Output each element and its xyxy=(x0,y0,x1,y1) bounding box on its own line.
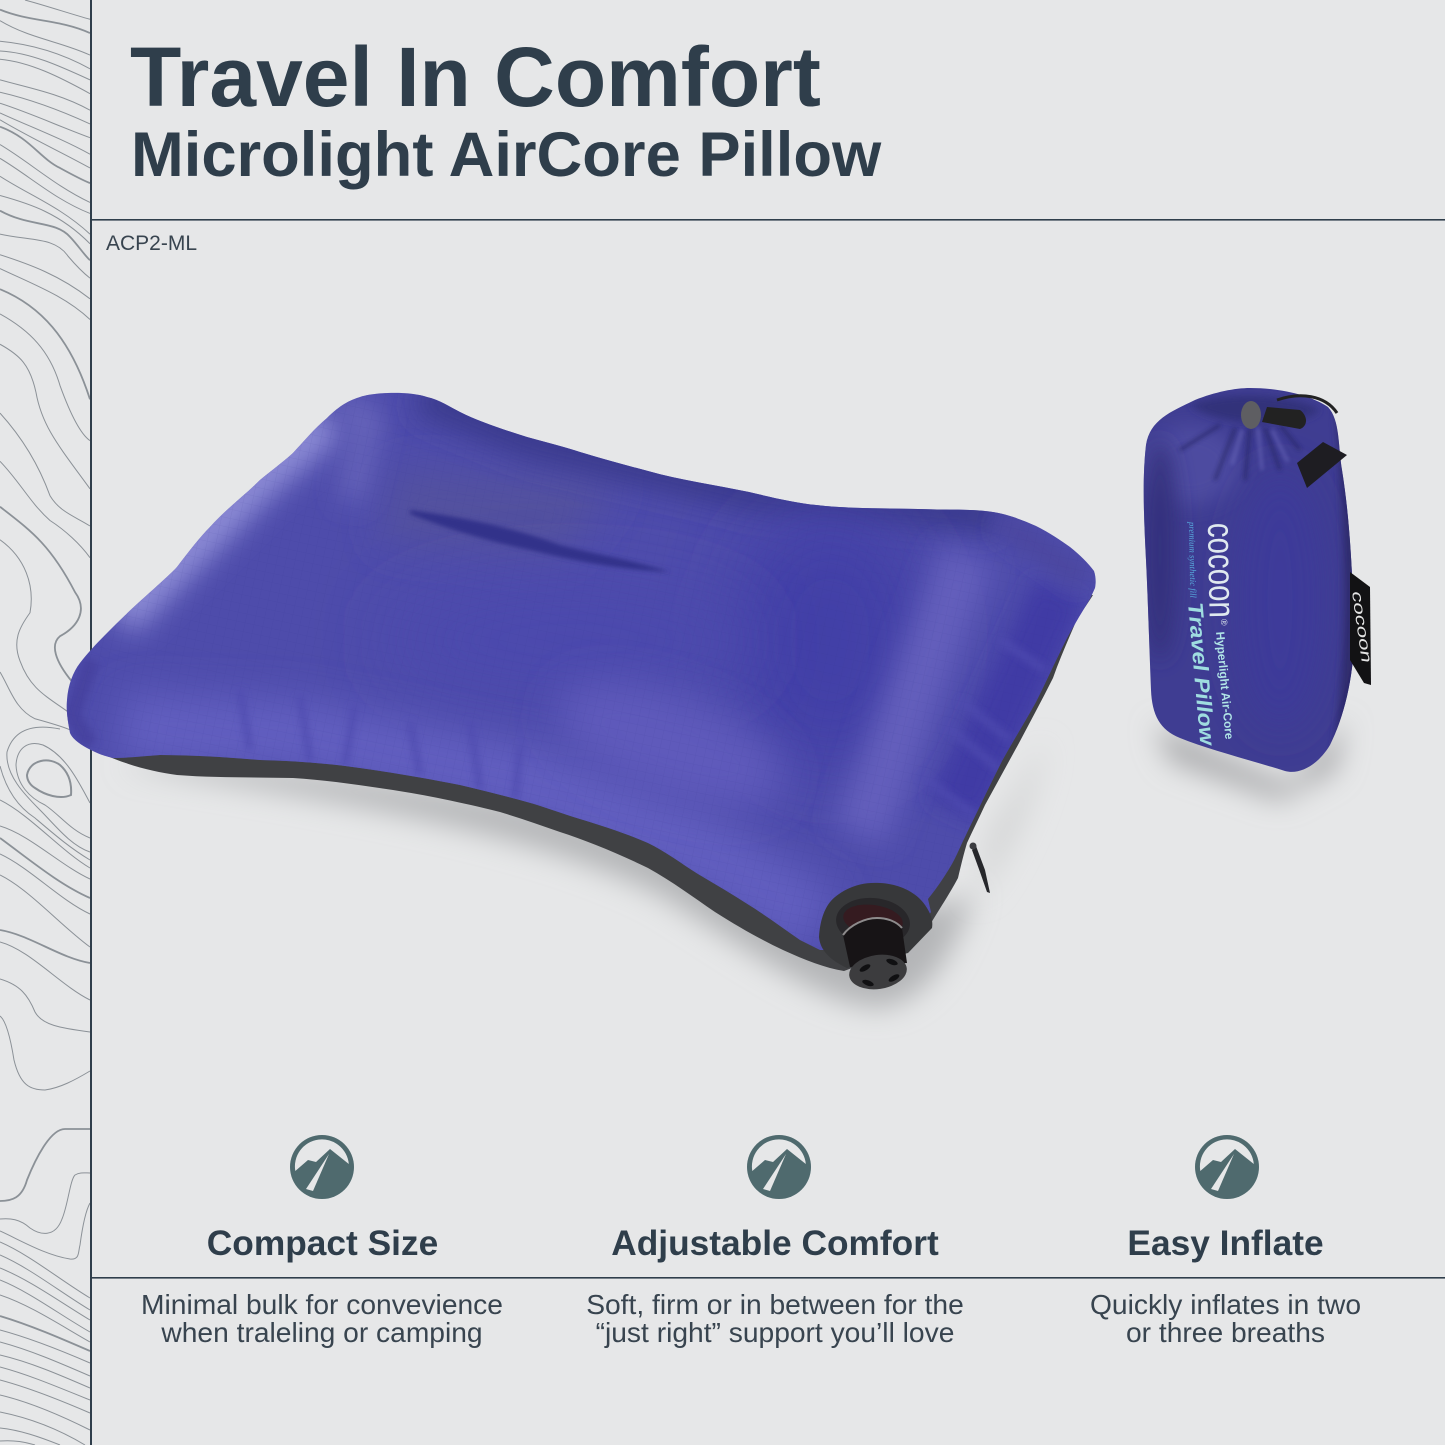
feature: easy inflate xyxy=(1090,1135,1361,1348)
feature: adjustable comfort: “just right” support you’ll love xyxy=(596,1316,954,1348)
description: Minimal bulk for convevience xyxy=(141,1288,503,1320)
title: Travel In Comfort xyxy=(130,30,821,124)
model code: ACP2-ML xyxy=(106,232,197,255)
subtitle: Microlight AirCore Pillow xyxy=(131,120,882,190)
stuff sack xyxy=(1144,388,1371,772)
heading: Easy Inflate xyxy=(1127,1224,1324,1263)
topographic contour pattern xyxy=(0,0,90,1445)
pillow fabric xyxy=(50,380,1110,980)
icon: mountain xyxy=(1195,1135,1259,1199)
sack product line: Hyperlight Air-Core xyxy=(1213,631,1236,740)
heading: Adjustable Comfort xyxy=(611,1224,939,1263)
description: Soft, firm or in between for the xyxy=(586,1288,964,1320)
feature: easy inflate: or three breaths xyxy=(1126,1316,1325,1348)
ripstop texture xyxy=(206,478,267,532)
shadow: stuff sack xyxy=(1155,720,1345,800)
feature: compact size xyxy=(141,1135,503,1348)
stuff sack body xyxy=(1144,388,1352,772)
valve xyxy=(819,883,932,993)
pillow xyxy=(50,380,1110,993)
heading: Compact Size xyxy=(207,1224,438,1263)
icon: mountain xyxy=(747,1135,811,1199)
pillow dark underside xyxy=(105,595,1093,971)
pillow wrinkles xyxy=(242,647,1040,802)
pillow dent xyxy=(410,510,670,572)
drawcord toggle xyxy=(1241,396,1337,429)
sack brand text: cocoon xyxy=(1200,522,1243,618)
sack product name: Travel Pillow xyxy=(1183,601,1219,748)
tag brand text: cocoon xyxy=(1348,590,1375,664)
strap loop xyxy=(1297,442,1347,488)
hang tag xyxy=(1350,572,1371,685)
feature: adjustable comfort xyxy=(586,1135,964,1348)
feature: compact size: when traleling or camping xyxy=(160,1316,483,1348)
zipper pull xyxy=(972,846,990,893)
icon: mountain xyxy=(290,1135,354,1199)
sack registered mark: ® xyxy=(1219,619,1229,626)
description: Quickly inflates in two xyxy=(1090,1288,1361,1320)
shadow: pillow xyxy=(120,764,975,1008)
sack tagline: premium synthetic fill xyxy=(1187,521,1198,599)
